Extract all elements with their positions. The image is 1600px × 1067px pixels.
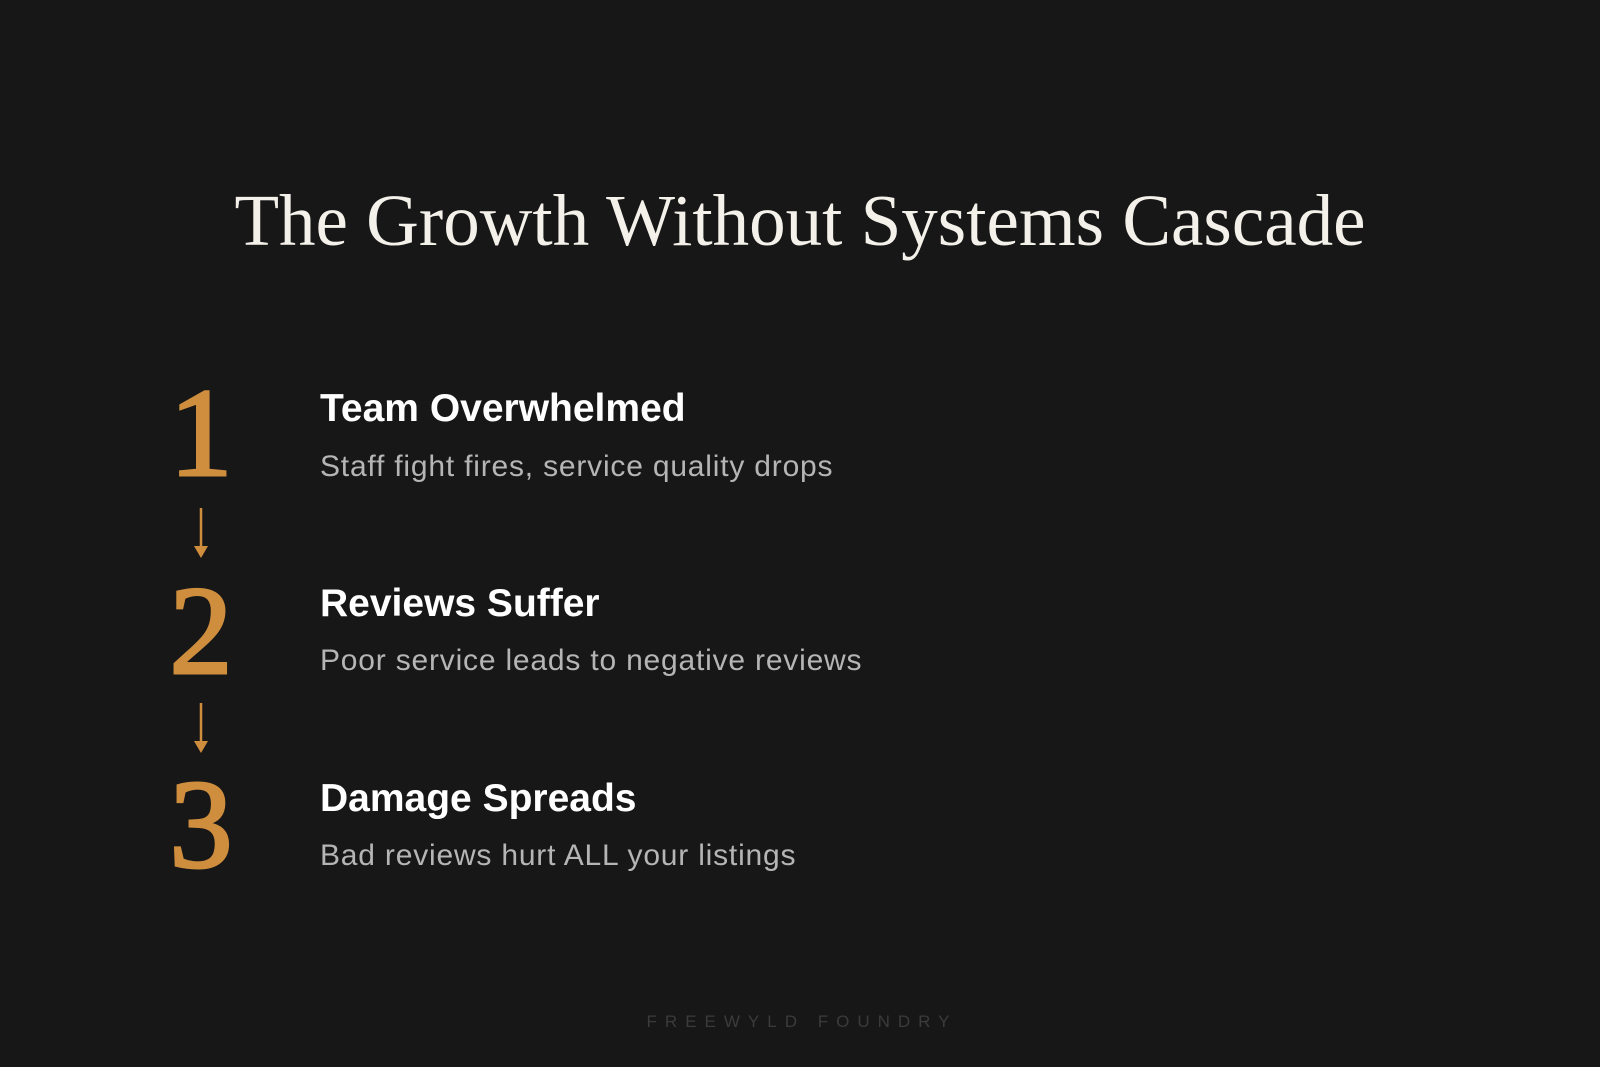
number 2: 2 bbox=[170, 562, 232, 701]
heading: Reviews Suffer: Reviews Suffer bbox=[320, 582, 600, 625]
number 1: 1 bbox=[170, 364, 232, 503]
arrow 2 to 3 bbox=[194, 703, 208, 753]
heading: Team Overwhelmed: Team Overwhelmed bbox=[320, 387, 686, 430]
arrow 1 to 2 bbox=[194, 508, 208, 558]
description 1: Staff fight fires, service quality drops bbox=[320, 450, 833, 483]
step 1 bbox=[170, 364, 833, 503]
description 2: Poor service leads to negative reviews bbox=[320, 644, 862, 677]
footer brand: FREEWYLD FOUNDRY bbox=[647, 1012, 957, 1031]
number 3: 3 bbox=[170, 756, 232, 895]
description 3: Bad reviews hurt ALL your listings bbox=[320, 839, 796, 872]
step 2 bbox=[170, 562, 862, 701]
title: The Growth Without Systems Cascade bbox=[234, 180, 1366, 261]
step 3 bbox=[170, 756, 796, 895]
heading: Damage Spreads: Damage Spreads bbox=[320, 777, 636, 820]
